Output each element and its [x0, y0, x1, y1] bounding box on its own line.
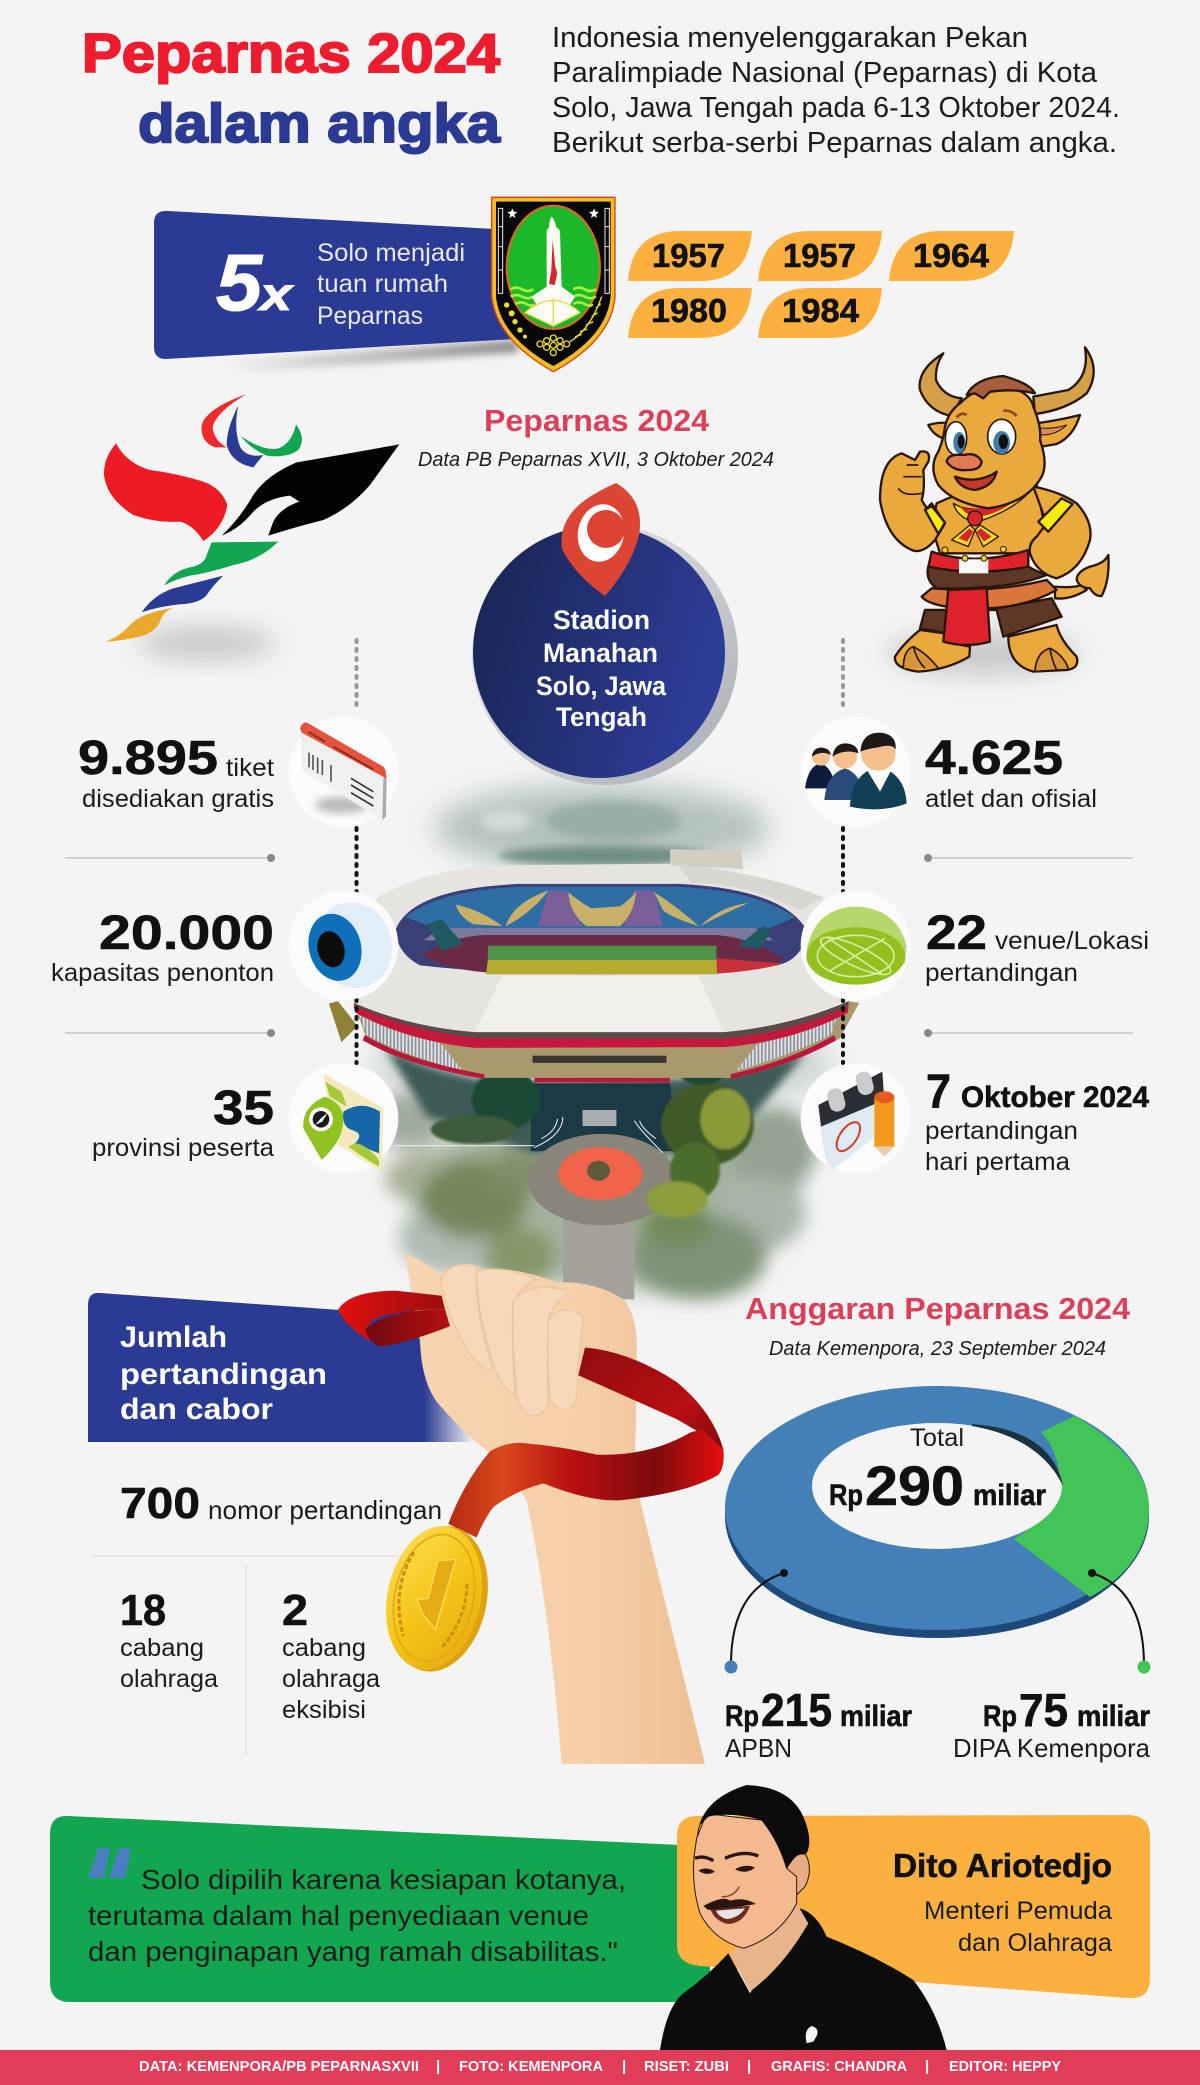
stat: cabang eksibisi: cabang	[282, 1634, 366, 1662]
title: Peparnas 2024	[82, 22, 500, 84]
intro text: Berikut serba-serbi Peparnas dalam angka.	[552, 127, 1117, 159]
callout: APBN: Rp	[725, 1700, 759, 1733]
banner	[154, 211, 515, 359]
location name: Tengah	[556, 702, 647, 732]
arm and palm	[405, 1254, 705, 1764]
mouth	[955, 472, 997, 490]
heading: Anggaran Peparnas 2024: Anggaran Peparnas 2024	[745, 1291, 1131, 1326]
blue wave	[142, 576, 223, 612]
stat: cabang olahraga: olahraga	[120, 1665, 218, 1693]
count 5x	[216, 238, 295, 327]
title	[82, 22, 500, 154]
footer bar: EDITOR: HEPPY	[949, 2058, 1061, 2075]
medal	[373, 1516, 501, 1681]
finger lines	[898, 465, 922, 494]
panel: speaker: dan Olahraga	[958, 1929, 1112, 1957]
year 1984	[758, 288, 882, 338]
donut chart: budget	[725, 1386, 1149, 1638]
red flame	[104, 443, 227, 541]
panel: jumlah pertandingan heading: dan cabor	[120, 1393, 273, 1426]
red belt	[928, 550, 1028, 572]
belt patch	[959, 559, 988, 573]
left arm and thumb	[880, 451, 945, 551]
armband right	[1038, 498, 1073, 532]
stat: cabang eksibisi: 2	[282, 1586, 308, 1635]
moustache	[703, 1899, 756, 1910]
year 1957	[758, 231, 882, 281]
green wave	[164, 542, 278, 586]
banner text	[317, 239, 465, 330]
panel: speaker: Dito Ariotedjo	[893, 1847, 1112, 1884]
count 5x: x	[256, 268, 295, 320]
icon: map	[288, 1063, 398, 1173]
pitch	[486, 946, 717, 974]
panel: five times host	[154, 211, 520, 372]
intro text: Paralimpiade Nasional (Peparnas) di Kota	[552, 57, 1098, 89]
stat: tiket gratis: tiket	[226, 754, 274, 782]
stat: atlet dan ofisial: 4.625	[925, 732, 1063, 785]
heading: Peparnas 2024: Peparnas 2024	[484, 403, 710, 438]
year 1984: 1984	[782, 292, 860, 329]
footer bar: |	[747, 2058, 751, 2075]
brows	[957, 411, 1017, 417]
stadium roof	[348, 864, 856, 1032]
stat: hari pertama: hari pertama	[925, 1148, 1070, 1176]
banner text: tuan rumah	[317, 270, 448, 298]
donut hole	[812, 1423, 1063, 1549]
callout: APBN	[724, 1569, 912, 1763]
source: Kemenpora: Data Kemenpora, 23 September 2024	[769, 1338, 1106, 1360]
stat: venue: 22	[926, 907, 987, 960]
location name: Stadion	[553, 605, 650, 635]
stat: tiket gratis: disediakan gratis	[82, 785, 274, 813]
teeth	[716, 1908, 745, 1919]
stat: venue: venue/Lokasi	[995, 927, 1149, 955]
stat: provinsi peserta	[92, 1063, 398, 1173]
footer bar	[0, 2050, 1200, 2085]
callout: APBN: APBN	[725, 1733, 792, 1763]
quote text: terutama dalam hal penyediaan venue	[88, 1900, 589, 1931]
eyes	[698, 1866, 755, 1874]
mouth	[710, 1906, 750, 1924]
location name: Solo, Jawa	[536, 671, 666, 701]
year 1964: 1964	[913, 237, 990, 274]
year 1980	[628, 288, 752, 338]
total label: Total	[910, 1424, 964, 1452]
intro text	[552, 22, 1120, 159]
stat: kapasitas penonton: kapasitas penonton	[51, 959, 274, 987]
callout: APBN: 215	[761, 1684, 832, 1736]
footer bar: RISET: ZUBI	[644, 2058, 729, 2075]
stat: venue: pertandingan	[925, 959, 1078, 987]
trees	[374, 1092, 816, 1299]
footer bar: FOTO: KEMENPORA	[459, 2058, 603, 2075]
year 1980: 1980	[651, 292, 727, 329]
fingers	[441, 1265, 583, 1416]
intro text: Solo, Jawa Tengah pada 6-13 Oktober 2024.	[552, 92, 1120, 124]
year 1957: 1957	[652, 237, 725, 274]
icon: calendar	[801, 1063, 911, 1173]
scarf	[942, 487, 1033, 561]
footer bar: |	[622, 2058, 626, 2075]
ear	[787, 1854, 809, 1897]
year 1957	[628, 231, 752, 281]
banner text: Peparnas	[317, 302, 423, 330]
seating bowl	[395, 884, 807, 974]
footer bar: DATA: KEMENPORA/PB PEPARNASXVII	[139, 2058, 419, 2075]
eyebrows	[695, 1853, 758, 1861]
skirt	[922, 580, 1057, 608]
horns	[920, 353, 962, 416]
separator lines	[65, 854, 1133, 1037]
tail	[1055, 585, 1087, 599]
total label: miliar	[973, 1479, 1046, 1512]
cap	[967, 376, 1035, 398]
shorts	[920, 610, 947, 633]
stat: venue	[801, 890, 1149, 1000]
feet	[895, 630, 970, 672]
icon: Peparnas logo	[104, 394, 399, 658]
dotted guide lines	[356, 640, 843, 1063]
panel: speaker	[677, 1815, 1150, 1998]
stat: tiket gratis: 9.895	[78, 732, 218, 785]
banner shadow	[215, 340, 520, 372]
stat: hari pertama: Oktober 2024	[961, 1081, 1149, 1114]
nose	[947, 454, 982, 470]
neck	[730, 1903, 808, 1992]
dividers	[92, 1556, 420, 1755]
agitos	[201, 394, 302, 467]
icon: Solo city emblem	[492, 197, 615, 372]
photo: Stadion Manahan	[329, 785, 859, 1299]
ground and plaza	[384, 1046, 806, 1299]
stat: provinsi peserta: provinsi peserta	[92, 1134, 274, 1162]
panel: jumlah pertandingan heading: pertandingan	[120, 1358, 327, 1391]
years list	[628, 231, 1014, 338]
eyes	[945, 419, 1016, 455]
callout: DIPA Kemenpora: miliar	[1077, 1700, 1150, 1733]
stat: cabang eksibisi	[282, 1586, 380, 1724]
head	[933, 385, 1045, 508]
count 5x: 5	[216, 238, 264, 327]
quote text: dan penginapan yang ramah disabilitas."	[88, 1936, 618, 1967]
stat: tiket gratis	[78, 717, 398, 827]
black flame	[222, 444, 399, 536]
footer bar: GRAFIS: CHANDRA	[771, 2058, 907, 2075]
ears	[928, 423, 948, 438]
source: PB Peparnas: Data PB Peparnas XVII, 3 Oktober 2024	[418, 449, 774, 471]
location name: Manahan	[543, 638, 658, 668]
stat: atlet dan ofisial: atlet dan ofisial	[925, 785, 1097, 813]
panel: jumlah pertandingan heading	[88, 1293, 474, 1442]
icon: quote mark	[88, 1848, 131, 1878]
intro text: Indonesia menyelenggarakan Pekan	[552, 22, 1028, 54]
stat: cabang eksibisi: olahraga	[282, 1665, 380, 1693]
illustration: hand with medal	[338, 1254, 724, 1764]
title: dalam angka	[138, 92, 500, 154]
torso	[932, 484, 1047, 553]
stat: cabang eksibisi: eksibisi	[282, 1696, 366, 1724]
stat: atlet dan ofisial	[801, 717, 1097, 827]
panel: speaker: Menteri Pemuda	[924, 1897, 1112, 1925]
stat: kapasitas penonton	[51, 890, 403, 1000]
year 1957: 1957	[783, 237, 856, 274]
pin	[806, 2026, 818, 2043]
stat: hari pertama: pertandingan	[925, 1117, 1078, 1145]
right arm	[1030, 487, 1091, 578]
stat: provinsi peserta: 35	[213, 1082, 274, 1135]
stat: nomor pertandingan: nomor pertandingan	[208, 1495, 442, 1525]
stat: nomor pertandingan: 700	[120, 1479, 200, 1528]
icon: people	[801, 717, 911, 827]
icon: ticket	[288, 717, 398, 827]
icon: location pin	[561, 483, 640, 596]
quote text	[88, 1864, 626, 1967]
face	[693, 1813, 797, 1948]
footer bar: |	[925, 2058, 929, 2075]
haze and forest background	[374, 785, 831, 1289]
red cloth	[943, 588, 990, 645]
shirt	[660, 1908, 947, 2050]
callout: DIPA Kemenpora: DIPA Kemenpora	[953, 1733, 1151, 1763]
stat: cabang olahraga: 18	[120, 1586, 166, 1635]
total label	[829, 1424, 1046, 1517]
portrait: Dito Ariotedjo	[660, 1785, 947, 2050]
icon: stadium	[288, 890, 403, 1000]
total label: Rp	[829, 1479, 863, 1512]
callout: DIPA Kemenpora: 75	[1019, 1684, 1068, 1736]
icon: mascot	[880, 347, 1109, 675]
stat: hari pertama: 7	[926, 1066, 951, 1119]
stat: nomor pertandingan	[120, 1479, 442, 1528]
stat: hari pertama	[801, 1063, 1149, 1176]
slice: DIPA Kemenpora	[1014, 1416, 1149, 1597]
ribbon loop	[338, 1291, 450, 1346]
stat: kapasitas penonton: 20.000	[99, 907, 274, 960]
callout: APBN: miliar	[840, 1700, 912, 1733]
stadium wall	[329, 1001, 859, 1082]
hair	[697, 1785, 809, 1868]
stat: cabang olahraga	[120, 1586, 218, 1693]
location name	[536, 605, 666, 732]
panel: jumlah pertandingan heading: Jumlah	[120, 1321, 227, 1354]
callout: DIPA Kemenpora: Rp	[983, 1700, 1017, 1733]
armband left	[925, 506, 945, 534]
ribbon upper band	[578, 1347, 724, 1475]
brown sash	[928, 567, 1047, 588]
ribbon main band	[448, 1429, 724, 1537]
banner text: Solo menjadi	[317, 239, 465, 267]
nose	[722, 1887, 739, 1897]
location circle	[472, 483, 738, 785]
forest detail	[481, 801, 713, 866]
panel: quote	[50, 1816, 710, 2002]
yellow wave	[105, 608, 174, 642]
stat: cabang olahraga: cabang	[120, 1634, 204, 1662]
icon: green dome	[801, 890, 911, 1000]
total label: 290	[865, 1454, 964, 1517]
callout: DIPA Kemenpora	[953, 1569, 1151, 1763]
quote text: Solo dipilih karena kesiapan kotanya,	[141, 1864, 626, 1895]
year 1964	[889, 231, 1014, 281]
big trees	[431, 1064, 754, 1217]
footer bar: |	[436, 2058, 440, 2075]
